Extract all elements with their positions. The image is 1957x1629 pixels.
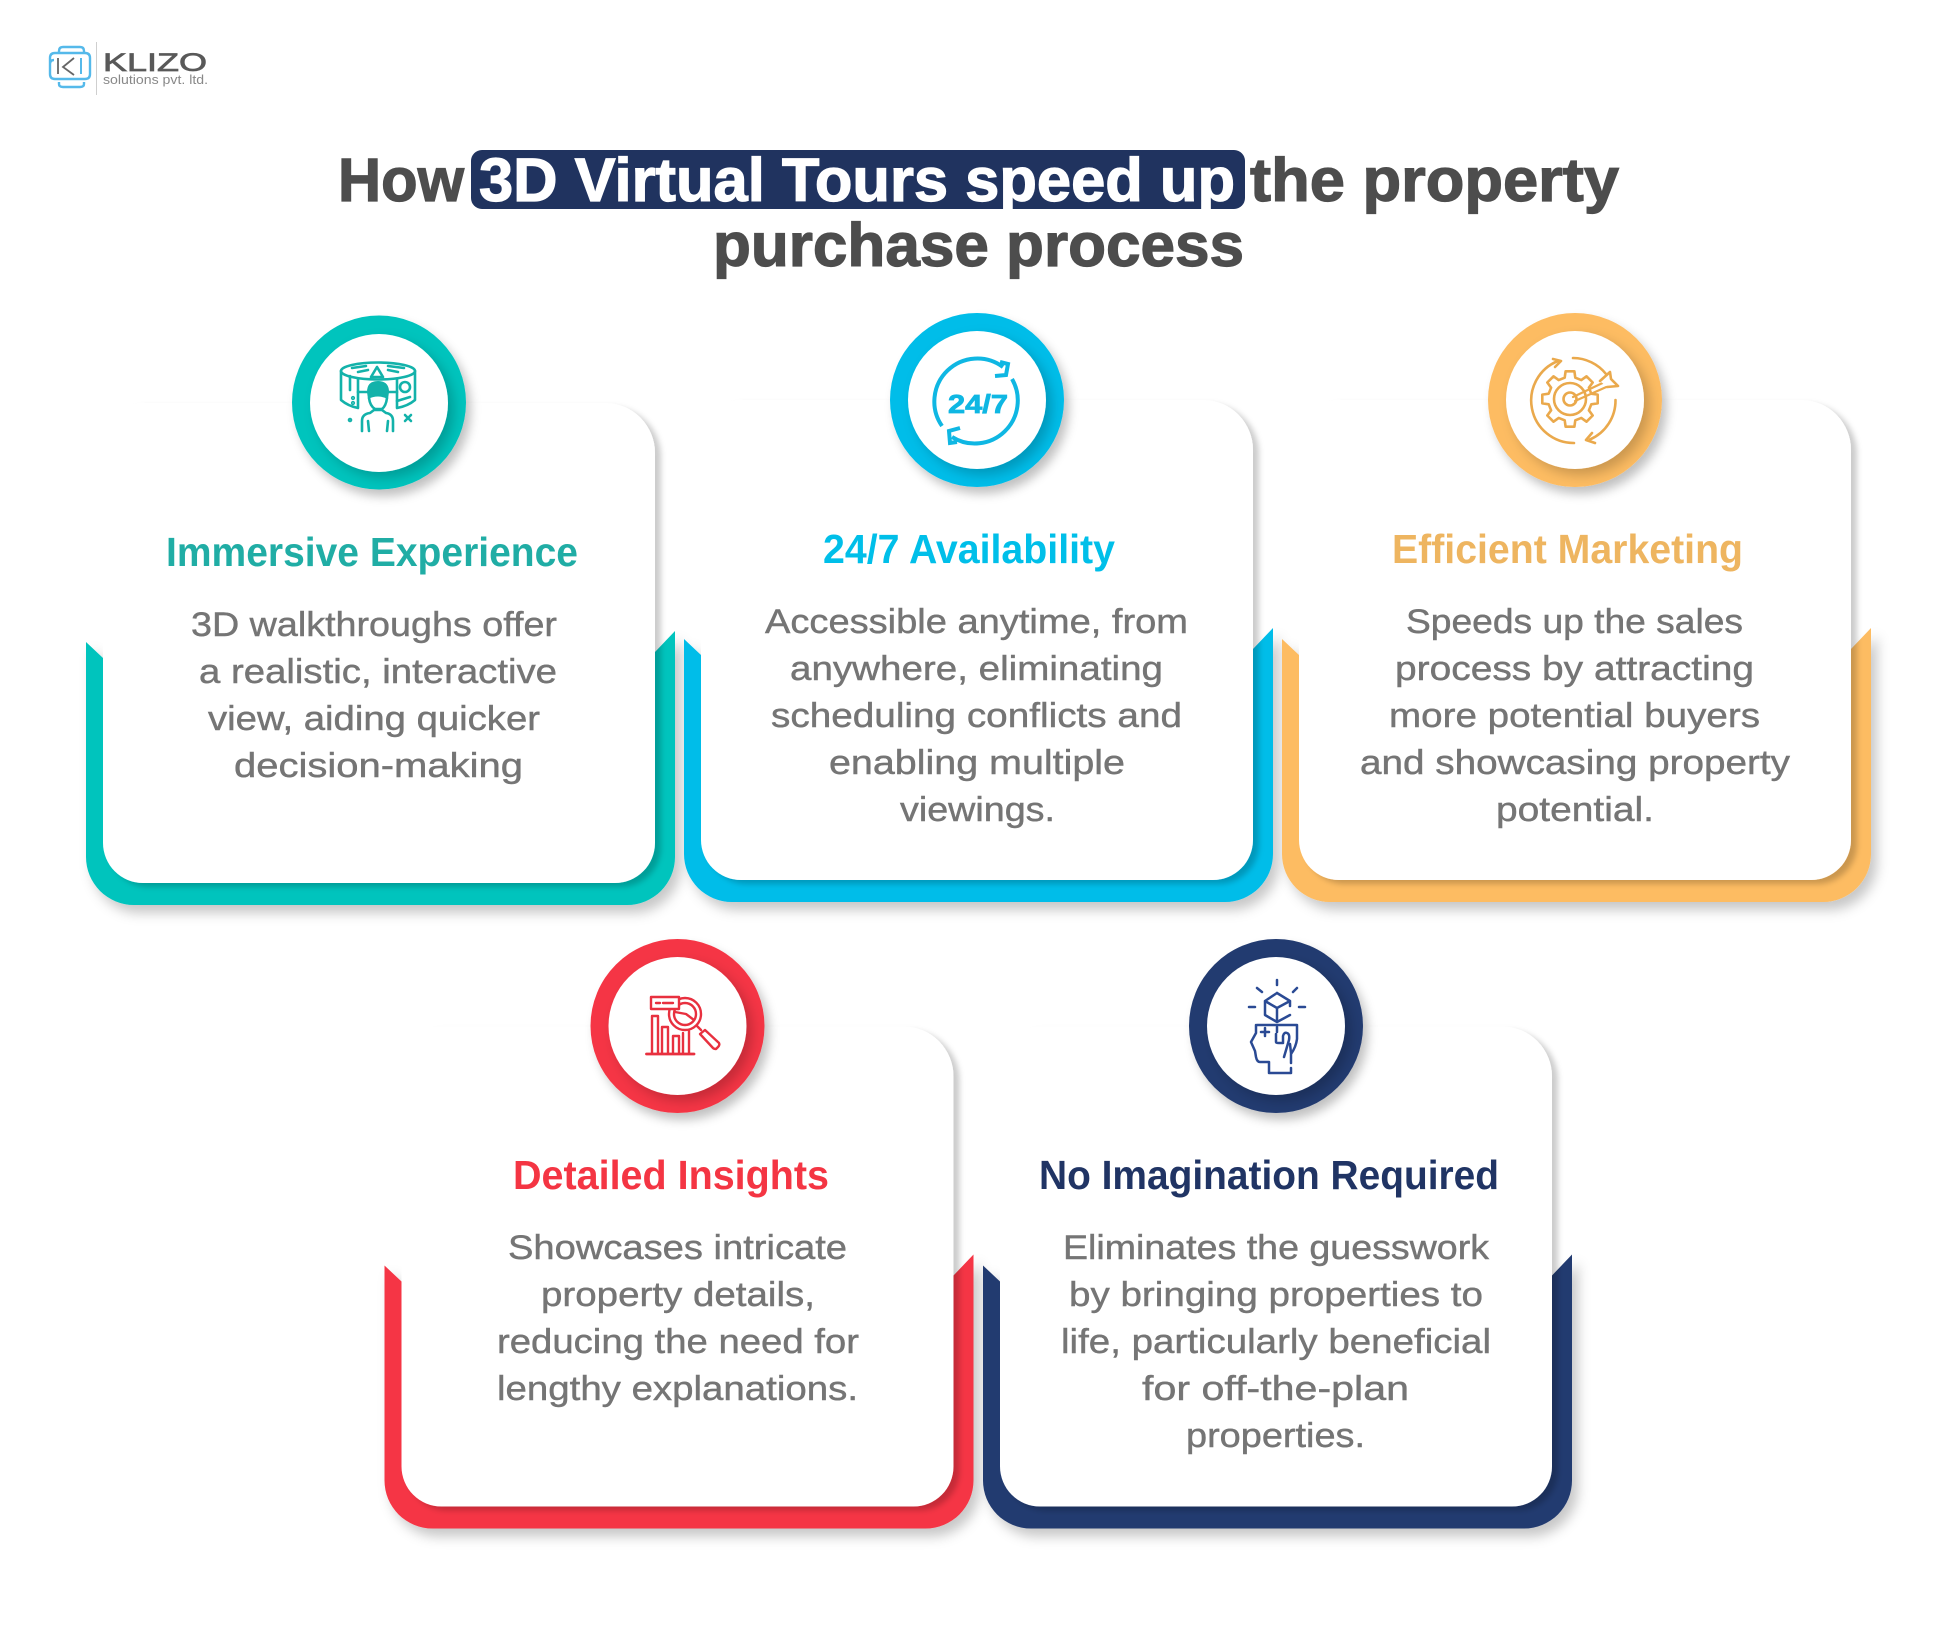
body text: view, aiding quicker xyxy=(208,700,540,738)
body text xyxy=(497,1229,859,1408)
icon: Klizo mark xyxy=(50,47,90,87)
icon: gear and target xyxy=(1531,358,1618,443)
body text xyxy=(191,606,557,785)
body text: and showcasing property xyxy=(1360,744,1791,782)
icon: chart and magnifier xyxy=(646,997,719,1054)
badge xyxy=(890,313,1064,487)
icon: 24/7 cycle xyxy=(934,359,1018,444)
badge xyxy=(1189,939,1363,1113)
body text xyxy=(1061,1229,1491,1455)
card frame xyxy=(86,631,675,905)
body text: Speeds up the sales xyxy=(1406,603,1743,641)
body text: for off-the-plan xyxy=(1142,1370,1409,1408)
body text: more potential buyers xyxy=(1389,697,1760,735)
body text: decision-making xyxy=(234,747,523,785)
heading: 24/7 Availability xyxy=(823,526,1115,572)
body text: lengthy explanations. xyxy=(497,1370,858,1408)
panel: Detailed Insights xyxy=(384,939,974,1528)
panel: Efficient Marketing xyxy=(1282,313,1871,902)
icon: person in virtual tour xyxy=(341,362,415,431)
body text: a realistic, interactive xyxy=(199,653,557,691)
heading: No Imagination Required xyxy=(1039,1152,1499,1198)
body text: viewings. xyxy=(900,791,1055,829)
body text: process by attracting xyxy=(1395,650,1754,688)
card frame xyxy=(684,628,1273,902)
body text xyxy=(1360,603,1791,829)
body text: Accessible anytime, from xyxy=(765,603,1188,641)
wordmark: KLIZO xyxy=(103,49,207,77)
title line 2: purchase process xyxy=(713,211,1244,279)
body text: life, particularly beneficial xyxy=(1061,1323,1491,1361)
body text: enabling multiple xyxy=(829,744,1125,782)
body text: Eliminates the guesswork xyxy=(1063,1229,1490,1267)
body text: property details, xyxy=(541,1276,815,1314)
body text: Showcases intricate xyxy=(508,1229,847,1267)
body text xyxy=(765,603,1188,829)
card frame xyxy=(1282,628,1871,902)
body text: by bringing properties to xyxy=(1069,1276,1483,1314)
title words: the property: the property xyxy=(1250,146,1619,214)
badge xyxy=(590,939,764,1113)
body text: 3D walkthroughs offer xyxy=(191,606,557,644)
badge: 24/7 xyxy=(948,389,1008,419)
panel: 24/7 Availability xyxy=(684,313,1273,902)
card face xyxy=(701,400,1253,880)
title word: How: How xyxy=(338,146,465,214)
body text: properties. xyxy=(1186,1417,1365,1455)
body text: potential. xyxy=(1496,791,1654,829)
badge xyxy=(1488,313,1662,487)
card frame xyxy=(983,1254,1572,1528)
title highlight box xyxy=(471,150,1245,209)
tagline: solutions pvt. ltd. xyxy=(103,72,208,87)
card face xyxy=(103,403,655,883)
panel: No Imagination Required xyxy=(983,939,1572,1528)
body text: scheduling conflicts and xyxy=(771,697,1182,735)
badge xyxy=(292,316,466,490)
title xyxy=(338,146,1619,279)
icon detail: head xyxy=(367,381,389,399)
heading: Immersive Experience xyxy=(166,529,578,575)
logo: Klizo xyxy=(50,42,208,95)
icon: head with cube idea xyxy=(1249,980,1305,1073)
card face xyxy=(1000,1026,1552,1506)
card face xyxy=(402,1026,954,1506)
panel: Immersive Experience xyxy=(86,316,675,905)
card face xyxy=(1299,400,1851,880)
card frame xyxy=(384,1254,974,1528)
heading: Efficient Marketing xyxy=(1392,526,1743,572)
body text: reducing the need for xyxy=(497,1323,859,1361)
heading: Detailed Insights xyxy=(513,1152,829,1198)
body text: anywhere, eliminating xyxy=(790,650,1163,688)
title highlighted phrase: 3D Virtual Tours speed up xyxy=(479,146,1235,214)
